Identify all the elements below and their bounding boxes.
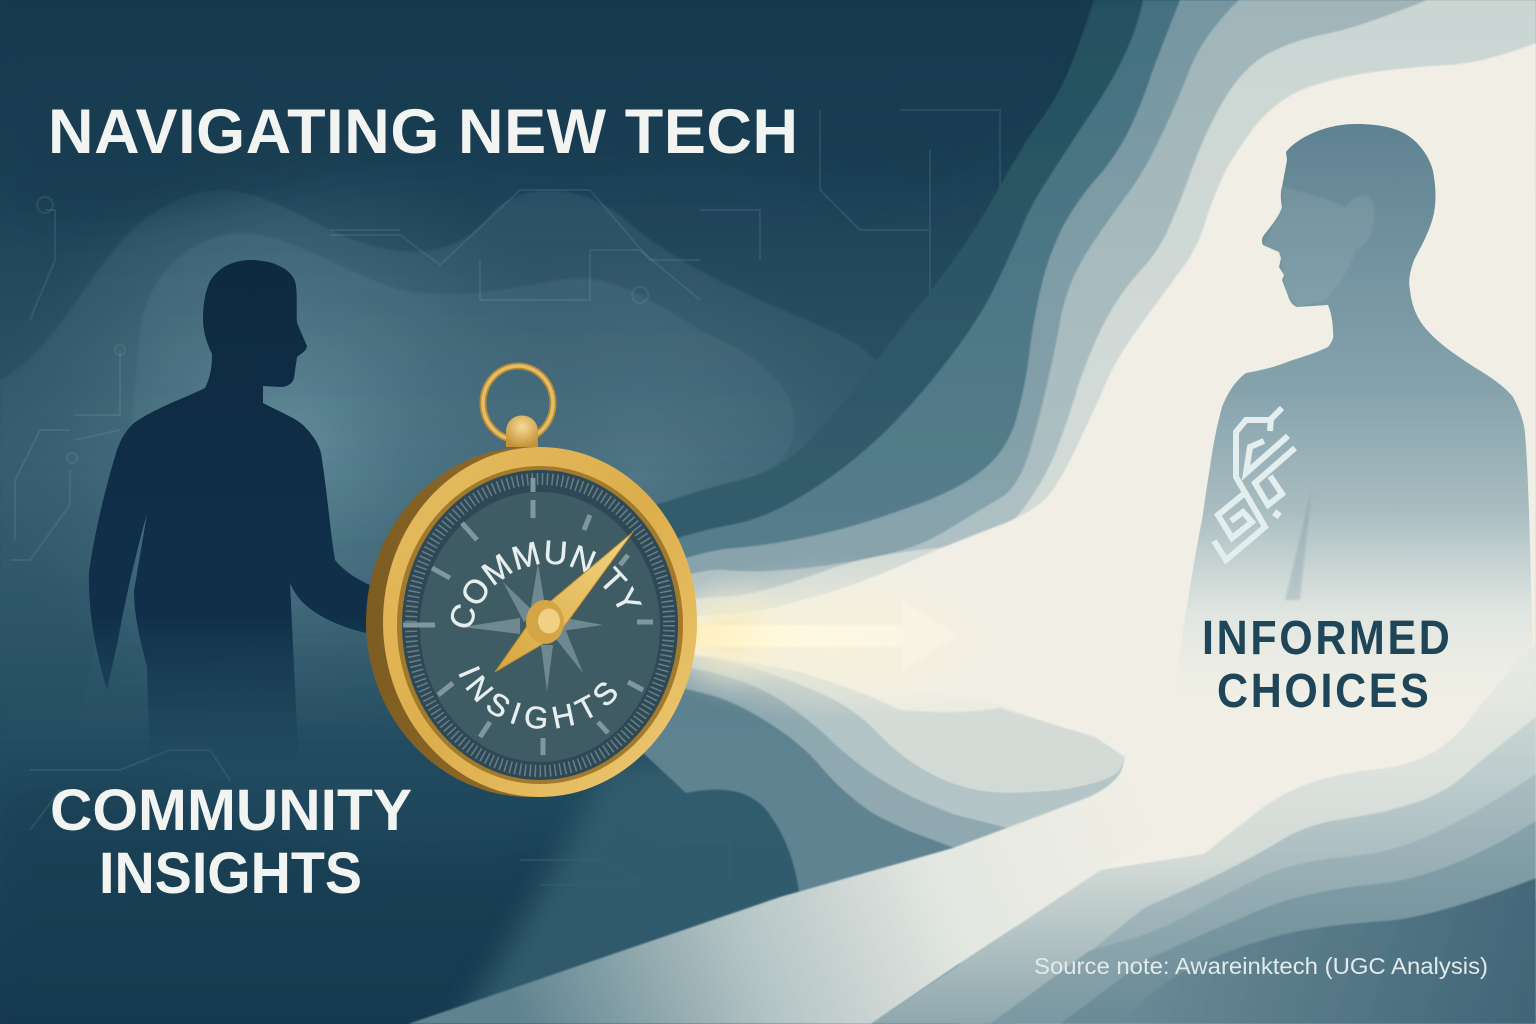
compass knob (506, 416, 538, 447)
compass text: community: COMMUNITY (450, 540, 642, 628)
label: community insights: INSIGHTS (99, 841, 362, 906)
compass text: insights: INSIGHTS (458, 666, 617, 729)
source note: Source note: Awareinktech (UGC Analysis) (1034, 953, 1488, 979)
compass major ticks (403, 478, 653, 755)
face and ear shading (1263, 187, 1374, 307)
compass bezel (383, 447, 697, 797)
label: community insights (50, 778, 412, 906)
background: right flowing layered waves (460, 0, 1536, 1024)
right silhouette figure (1170, 124, 1534, 720)
compass needle (495, 532, 633, 672)
title: NAVIGATING NEW TECH (48, 97, 798, 167)
arm gap shading (1285, 487, 1312, 600)
label: community insights: COMMUNITY (50, 778, 412, 843)
compass fine tick ring (411, 479, 669, 771)
arrow: to informed choices (695, 602, 958, 670)
warm glow over light band (640, 560, 1020, 720)
icon: circuit tattoo on shoulder (1214, 408, 1295, 560)
label: informed choices (1202, 611, 1452, 718)
label: informed choices: CHOICES (1217, 664, 1431, 718)
glow at compass exit (655, 575, 805, 695)
compass hub (526, 600, 564, 644)
path: light road wedge (408, 744, 1225, 1024)
compass dial tick band (402, 470, 678, 780)
background: lower right waves (871, 644, 1536, 1024)
compass star (463, 563, 603, 692)
compass body (366, 447, 694, 797)
left silhouette figure (89, 260, 370, 770)
background: left swirl waves (0, 0, 1095, 1024)
label: informed choices: INFORMED (1202, 611, 1452, 665)
compass loop (483, 366, 553, 440)
compass inner dial (420, 492, 660, 762)
background: faint circuit traces (10, 110, 1000, 887)
compass (366, 362, 697, 797)
